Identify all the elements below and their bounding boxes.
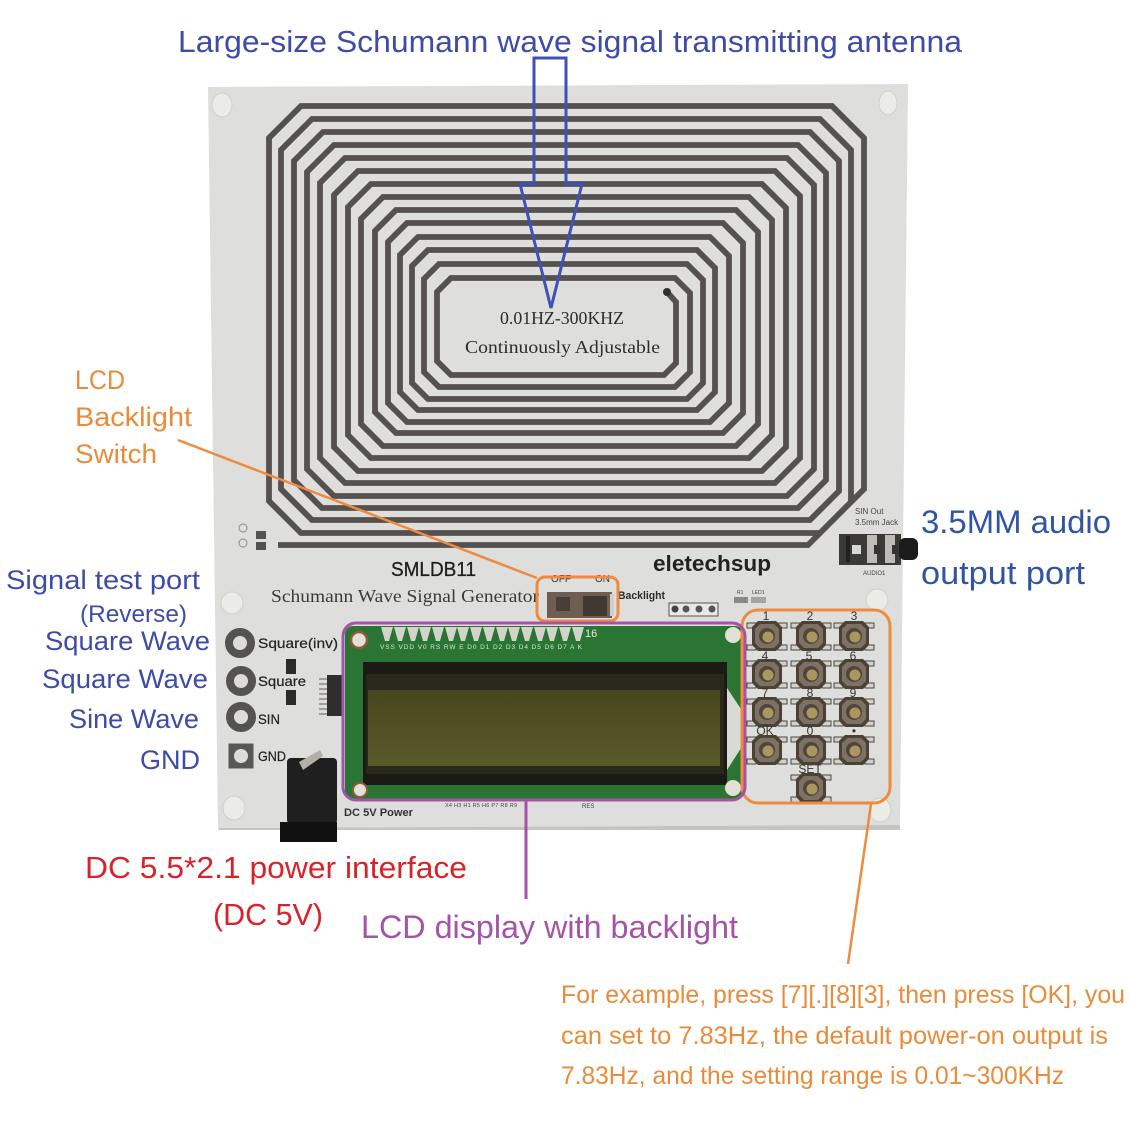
keypad labels: 1 — [763, 609, 770, 623]
text block: keypad usage example: 7.83Hz, and the setting range is 0.01~300KHz — [561, 1062, 1064, 1090]
label: power interface: (DC 5V) — [213, 897, 323, 932]
audio jack: AUDIO1 — [863, 571, 886, 577]
label: pad names — [42, 626, 210, 775]
audio jack — [839, 507, 918, 577]
leader line: backlight switch — [178, 440, 537, 578]
header J1 and indicator parts — [669, 590, 766, 616]
highlight: backlight switch — [537, 577, 618, 621]
label: pad names: GND — [140, 745, 200, 775]
keypad labels: 6 — [850, 649, 857, 663]
keypad labels: 3 — [851, 609, 858, 623]
keypad labels: 2 — [807, 609, 814, 623]
leader line: lcd — [524, 801, 528, 899]
keypad labels: • — [852, 724, 856, 738]
leader line: keypad — [848, 804, 871, 964]
antenna coil spiral — [269, 106, 864, 545]
keypad labels: 4 — [762, 649, 769, 663]
label: lcd backlight switch: LCD — [75, 365, 125, 395]
keypad buttons — [747, 621, 874, 803]
board text: adjustable: Continuously Adjustable — [465, 337, 660, 357]
highlight: lcd — [343, 623, 745, 800]
mounting standoffs — [212, 91, 897, 822]
label: signal test port: Signal test port — [6, 565, 201, 595]
power jack — [280, 750, 337, 842]
board text: product name: Schumann Wave Signal Generator — [271, 586, 539, 606]
label: power interface: DC 5.5*2.1 power interface — [85, 850, 467, 885]
pad labels: SIN — [258, 711, 280, 727]
arrow: antenna pointer — [520, 58, 582, 308]
lcd header pins — [381, 627, 584, 641]
backlight switch: OFF — [551, 574, 571, 585]
label: audio port — [921, 504, 1111, 591]
pad labels: Square(inv) — [258, 635, 338, 651]
label: power interface — [85, 850, 467, 932]
keypad labels: SET — [798, 762, 822, 776]
lcd pin labels: VSS VDD V0 RS RW E D0 D1 D2 D3 D4 D5 D6 D7 A K — [380, 644, 583, 651]
label: pad names: Square Wave — [45, 626, 210, 656]
text block: keypad usage example: For example, press [7][.][8][3], then press [OK], you — [561, 981, 1125, 1009]
panel: circuit board — [208, 84, 918, 842]
label: lcd backlight switch: Backlight — [75, 402, 193, 432]
board text: model: SMLDB11 — [391, 559, 476, 581]
keypad labels: 0 — [807, 724, 814, 738]
board text: brand: eletechsup — [653, 551, 771, 576]
board text: frequency range: 0.01HZ-300KHZ — [500, 308, 624, 328]
label: signal test port — [6, 565, 201, 628]
text block: keypad usage example: can set to 7.83Hz, the default power-on output is — [561, 1022, 1108, 1050]
audio jack: SIN Out — [855, 507, 884, 516]
power label: DC 5V Power — [344, 807, 414, 819]
label: lcd backlight switch: Switch — [75, 439, 157, 469]
pin count: 16 — [585, 628, 597, 640]
lcd module — [345, 626, 745, 799]
pad labels: Square — [258, 673, 306, 689]
header J1 and indicator parts: R1 — [737, 590, 744, 596]
label: pad names: Square Wave — [42, 664, 208, 694]
backlight switch: Backlight — [618, 590, 665, 602]
pad labels: GND — [258, 748, 286, 764]
label: audio port: 3.5MM audio — [921, 504, 1111, 540]
label: lcd display: LCD display with backlight — [361, 909, 738, 945]
keypad labels — [756, 609, 858, 776]
label: pad names: Sine Wave — [69, 704, 199, 734]
keypad labels: 7 — [762, 686, 769, 700]
keypad labels: OK — [756, 724, 774, 738]
label: lcd backlight switch — [75, 365, 193, 469]
title: Large-size Schumann wave signal transmitting antenna — [178, 24, 963, 59]
small print under lcd: X4 H3 H1 R5 H6 P7 R8 R9 — [445, 803, 517, 809]
keypad labels: 5 — [806, 649, 813, 663]
keypad labels: 8 — [807, 686, 814, 700]
backlight switch: ON — [595, 574, 610, 585]
coil end pad — [663, 288, 671, 296]
diodes and chip — [286, 659, 344, 716]
keypad labels: 9 — [850, 686, 857, 700]
audio jack: 3.5mm Jack — [855, 518, 899, 527]
backlight switch — [547, 574, 665, 618]
highlight: keypad — [742, 610, 890, 803]
small pads near coil start — [239, 524, 266, 550]
label: signal test port: (Reverse) — [80, 601, 187, 628]
res label: RES — [582, 804, 594, 810]
signal test pads — [228, 632, 254, 768]
pad labels — [258, 635, 338, 764]
header J1 and indicator parts: LED1 — [752, 590, 765, 596]
text block: keypad usage example — [561, 981, 1125, 1090]
label: audio port: output port — [921, 555, 1085, 591]
